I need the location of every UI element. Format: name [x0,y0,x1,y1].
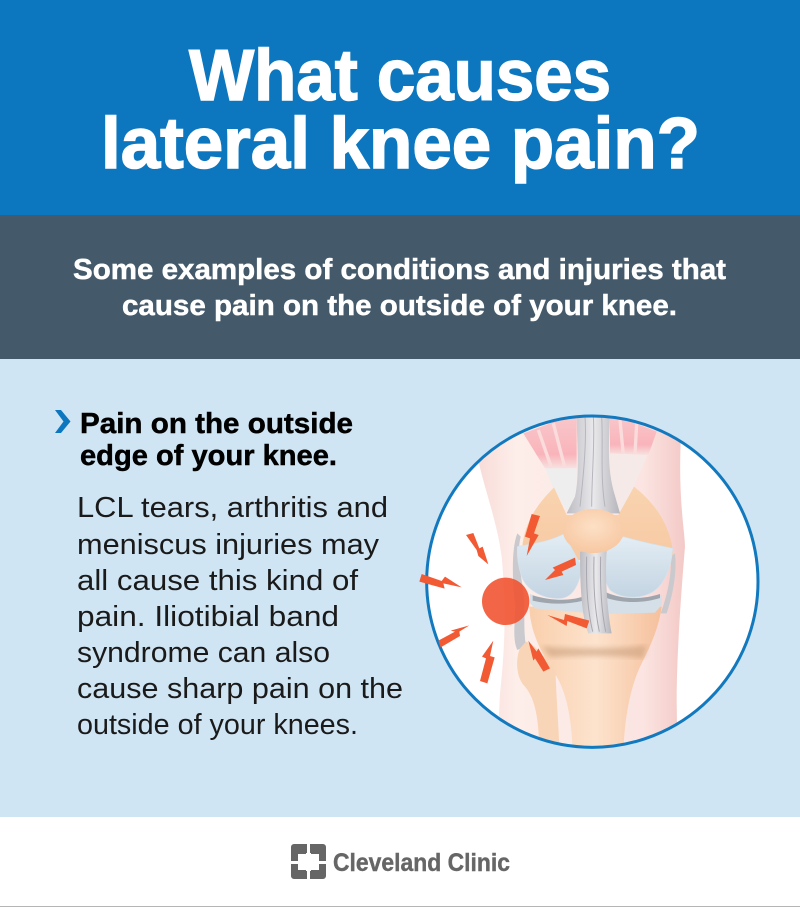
growth plate shading [542,645,647,658]
pain bolts [419,514,589,683]
header band [0,0,800,215]
patellar tendon [580,552,612,633]
femoral cartilage [517,533,673,599]
icon: chevron bullet [55,410,70,433]
pain spot [482,578,529,625]
circle outline [427,416,758,747]
subtitle: cause pain on the outside of your knee. [122,290,677,322]
title: lateral knee pain? [101,104,700,184]
thigh muscles [523,413,657,513]
body text: meniscus injuries may [77,529,380,561]
subtitle [73,254,726,322]
tibia [529,607,662,750]
panel heading [80,408,353,472]
body text: LCL tears, arthritis and [77,492,388,524]
patella [563,509,624,553]
knee illustration in circle [419,413,758,750]
bottom rule [0,906,800,907]
body text: all cause this kind of [77,565,359,597]
leg silhouette [479,413,685,750]
logo: Cleveland Clinic [333,849,510,877]
subtitle band [0,215,800,359]
fibula [517,642,559,747]
body text: syndrome can also [77,637,330,669]
quadriceps tendon [567,413,620,513]
lateral ligament [513,533,526,650]
medial ligament [661,553,676,613]
panel heading: Pain on the outside [80,408,353,440]
panel heading: edge of your knee. [80,440,337,472]
body text: cause sharp pain on the [77,673,403,705]
meniscus [530,592,662,614]
content panel [0,359,800,817]
footer [0,817,800,907]
logo [291,844,510,879]
icon: Cleveland Clinic cross [291,844,326,879]
title: What causes [189,36,611,116]
femur [522,487,673,560]
subtitle: Some examples of conditions and injuries that [73,254,726,286]
body text: outside of your knees. [77,709,358,741]
body text [77,492,403,741]
title [101,36,700,184]
body text: pain. Iliotibial band [77,601,339,633]
